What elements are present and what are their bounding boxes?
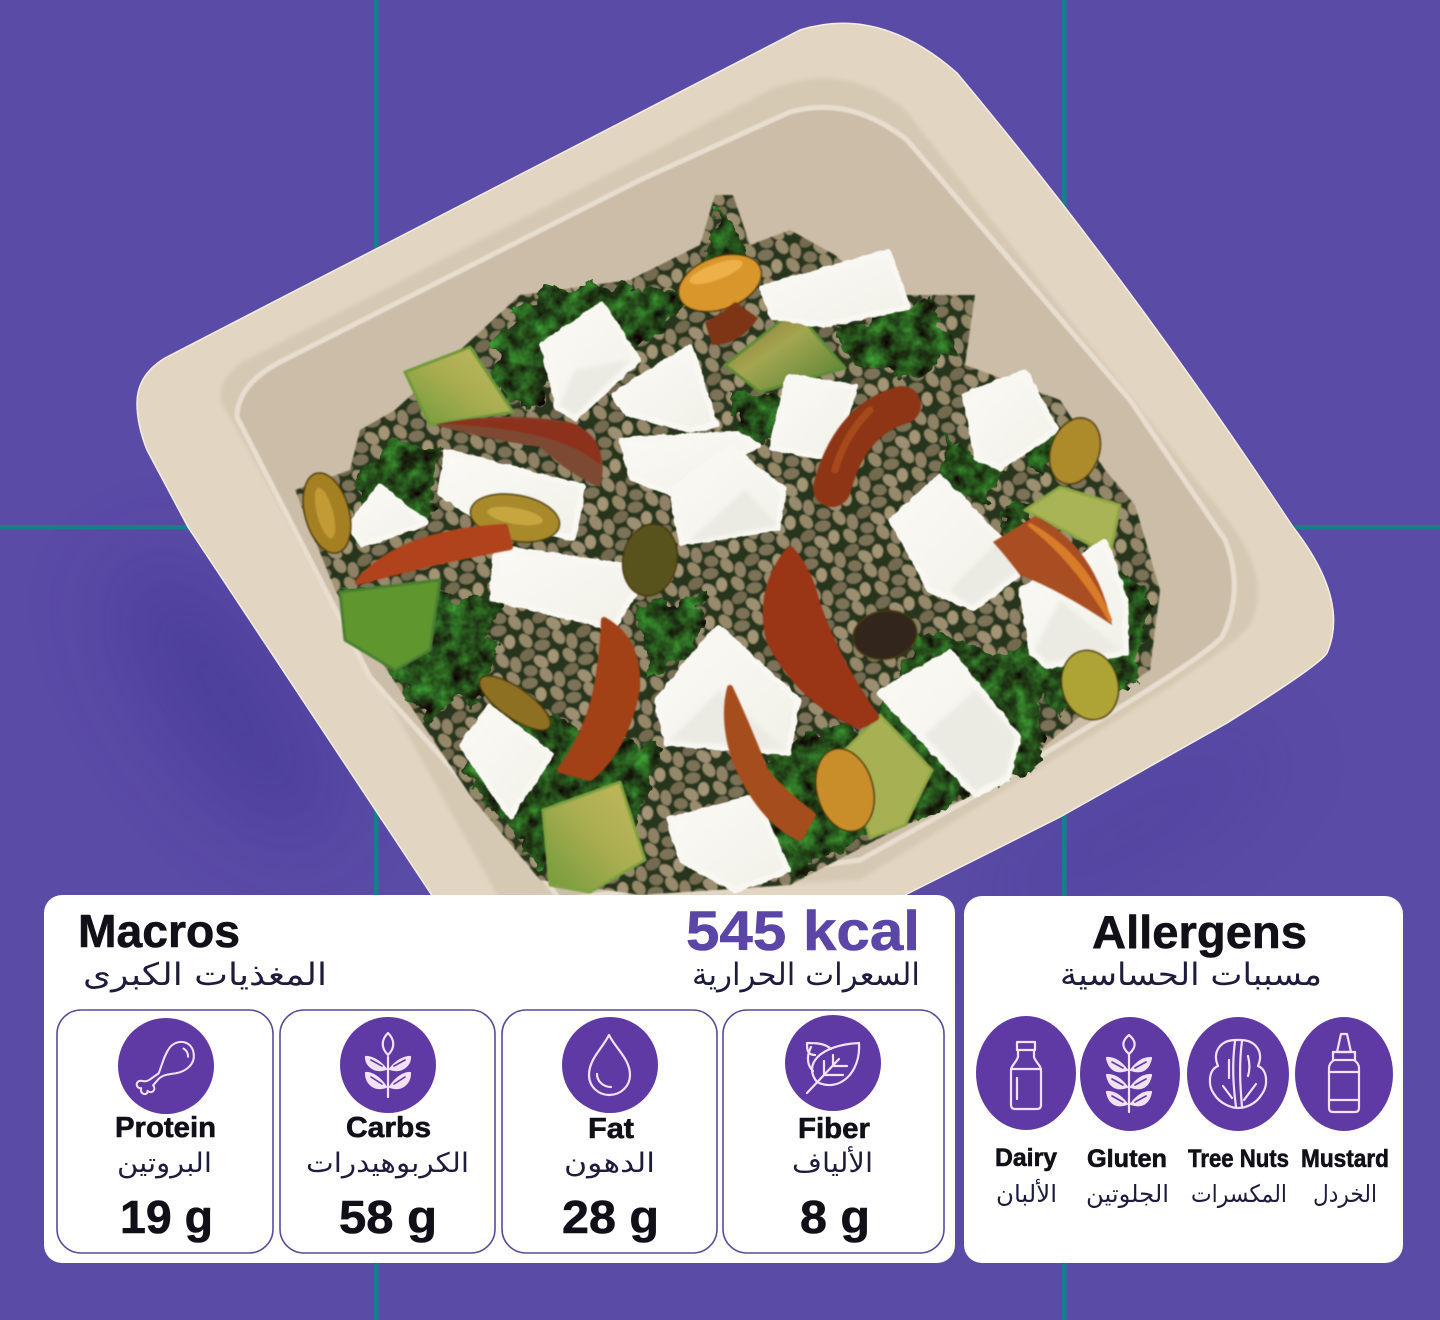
icon: wheat (1107, 1035, 1151, 1112)
card: fiber: Fiber (798, 1113, 870, 1145)
heading: macros (78, 905, 327, 993)
card: fat: 28 g (562, 1191, 659, 1243)
calories: 545 kcal (686, 899, 920, 962)
heading: macros: المغذيات الكبرى (83, 957, 327, 993)
allergen: dairy (976, 1016, 1076, 1208)
heading: allergens: Allergens (1092, 906, 1307, 958)
allergen: tree nuts: Tree Nuts (1188, 1145, 1289, 1173)
icon: drop (589, 1035, 630, 1095)
card: protein (57, 1010, 273, 1253)
icon: leaf (807, 1043, 859, 1093)
heading: allergens: مسببات الحساسية (1060, 957, 1322, 993)
card: fiber (723, 1010, 944, 1253)
panel: allergens (964, 896, 1403, 1263)
allergen: gluten: الجلوتين (1086, 1180, 1169, 1208)
heading: macros: Macros (78, 905, 240, 957)
allergen: mustard: Mustard (1301, 1145, 1389, 1173)
calories (686, 899, 920, 993)
salad (295, 195, 1160, 895)
allergen: dairy: الألبان (996, 1179, 1057, 1208)
avocado pieces (340, 310, 1120, 892)
heading: allergens (1060, 906, 1322, 993)
card: fat (502, 1010, 717, 1253)
food tray (137, 23, 1334, 900)
card: fat: الدهون (564, 1148, 655, 1179)
allergen: tree nuts: المكسرات (1191, 1180, 1287, 1208)
cheese shaded faces (560, 360, 1120, 790)
allergen: gluten (1080, 1017, 1180, 1208)
icon: walnut (1210, 1040, 1266, 1108)
card: fiber: الألياف (792, 1145, 873, 1179)
feta cubes (350, 252, 1126, 890)
pistachios (295, 244, 1126, 838)
card: fat: Fat (588, 1113, 634, 1145)
icon: wheat (366, 1033, 410, 1097)
card: protein: 19 g (120, 1191, 213, 1243)
card: carbs: Carbs (346, 1112, 431, 1144)
card: carbs: 58 g (339, 1191, 437, 1243)
grain and kale bed (295, 195, 1160, 895)
allergen: mustard (1295, 1017, 1393, 1208)
icon: mustard bottle (1329, 1034, 1359, 1112)
card: fiber: 8 g (800, 1191, 870, 1243)
allergen: dairy: Dairy (995, 1144, 1057, 1172)
card: protein: البروتين (117, 1148, 212, 1179)
icon: milk bottle (1011, 1042, 1041, 1109)
icon: chicken leg (137, 1042, 194, 1094)
card: carbs (280, 1010, 495, 1253)
allergen: mustard: الخردل (1313, 1180, 1377, 1208)
panel: macros (44, 895, 955, 1263)
card: carbs: الكربوهيدرات (306, 1148, 469, 1179)
allergen: tree nuts (1187, 1017, 1289, 1208)
calories: السعرات الحرارية (692, 957, 920, 993)
allergen: gluten: Gluten (1087, 1145, 1167, 1173)
card: protein: Protein (115, 1112, 216, 1144)
dates (358, 302, 1112, 838)
